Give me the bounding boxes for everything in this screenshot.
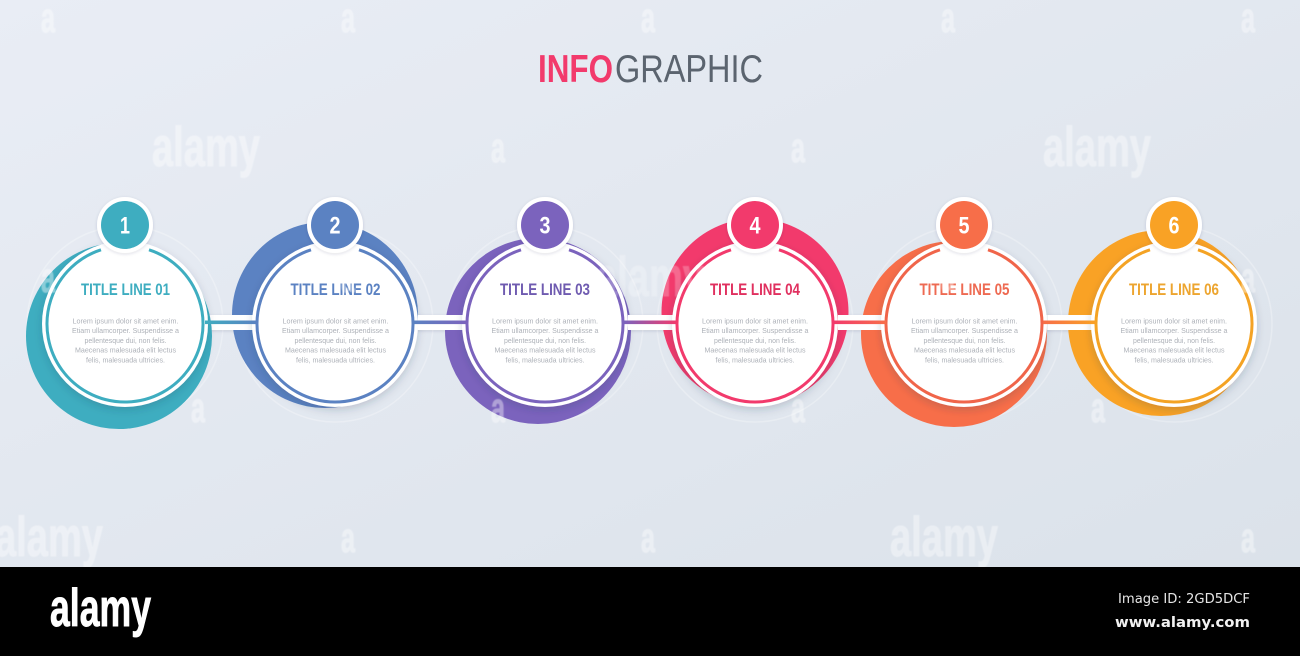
step 1 number badge: 1 [120, 212, 130, 240]
step 5 body text: Etiam ullamcorper. Suspendisse a [911, 326, 1019, 335]
connector band over disc 5 [838, 315, 895, 330]
step 3 body text [492, 316, 599, 364]
step 5 heading: TITLE LINE 05 [920, 281, 1010, 299]
watermarks: a [191, 384, 205, 431]
step 2 body text: pellentesque dui, non felis. [294, 336, 376, 345]
step 5 number badge [936, 197, 992, 253]
step 6 [1048, 197, 1257, 416]
connector band over disc 3 [418, 315, 490, 330]
step 2 heading: TITLE LINE 02 [290, 281, 380, 299]
step 1 body text: Maecenas malesuada elit lectus [75, 346, 176, 355]
connector: white band [195, 315, 1105, 330]
step 4 body text [702, 316, 809, 364]
watermarks: a [1091, 384, 1105, 431]
step 3 body text: felis, malesuada ultricies. [506, 355, 584, 364]
step 2 body text: Maecenas malesuada elit lectus [285, 346, 386, 355]
step 5 body text: Maecenas malesuada elit lectus [914, 346, 1015, 355]
step 4 body text: felis, malesuada ultricies. [716, 355, 794, 364]
step 5 body text: pellentesque dui, non felis. [924, 336, 1006, 345]
step 5 white disc [881, 241, 1047, 407]
watermarks: a [1241, 514, 1255, 561]
watermarks: alamy [890, 505, 998, 568]
step 1 body text: Lorem ipsum dolor sit amet enim. [72, 316, 178, 326]
step 4 [628, 197, 848, 407]
website: www.alamy.com [1115, 615, 1250, 631]
step 4 number badge: 4 [750, 212, 761, 240]
watermarks: a [341, 514, 355, 561]
step 5 body text: felis, malesuada ultricies. [925, 355, 1004, 364]
step 1 body text: Etiam ullamcorper. Suspendisse a [72, 326, 180, 335]
watermarks: a [641, 514, 655, 561]
step 2 body text: felis, malesuada ultricies. [296, 355, 375, 364]
step 1 [26, 197, 212, 429]
watermarks: a [41, 254, 55, 301]
step 2 body text: Lorem ipsum dolor sit amet enim. [282, 316, 388, 326]
step 5 body text: Lorem ipsum dolor sit amet enim. [912, 316, 1018, 326]
step 4 white disc [672, 241, 838, 407]
step 4 number badge [727, 197, 783, 253]
step 3 body text: Etiam ullamcorper. Suspendisse a [492, 326, 599, 335]
step 2 ring [257, 250, 413, 402]
step 4 body text: pellentesque dui, non felis. [714, 336, 796, 345]
title: GRAPHIC [615, 48, 763, 91]
step 3 number badge [517, 197, 573, 253]
step 6 body text: Lorem ipsum dolor sit amet enim. [1121, 316, 1227, 326]
watermarks: a [341, 254, 355, 301]
step 2 number badge [307, 197, 363, 253]
step 5 backing disc [861, 241, 1047, 427]
step 4 body text: Maecenas malesuada elit lectus [704, 346, 806, 355]
step 3 body text: pellentesque dui, non felis. [504, 336, 586, 345]
step 2 number badge: 2 [330, 212, 340, 240]
step 5 ring [886, 250, 1042, 402]
step 3 [418, 197, 631, 424]
step 2 body text: Etiam ullamcorper. Suspendisse a [282, 326, 390, 335]
step 1 body text: felis, malesuada ultricies. [86, 355, 165, 364]
step 1 heading: TITLE LINE 01 [81, 281, 170, 299]
watermarks: a [941, 254, 955, 301]
title: INFO [538, 48, 613, 91]
step 6 heading: TITLE LINE 06 [1129, 281, 1219, 299]
step 5 number badge: 5 [958, 212, 970, 240]
connector band over disc 6 [1048, 315, 1105, 330]
step 3 number badge: 3 [540, 212, 550, 240]
title [538, 48, 763, 91]
step 3 white disc [462, 241, 628, 407]
step 2 backing disc [232, 222, 418, 408]
step 6 number badge [1146, 197, 1202, 253]
connector lines [205, 320, 1096, 324]
step 1 backing disc [26, 243, 212, 429]
step 6 backing disc [1068, 230, 1254, 416]
watermarks: a [791, 124, 805, 171]
watermarks: alamy [1043, 115, 1151, 178]
watermarks: a [791, 384, 805, 431]
step 6 number badge: 6 [1168, 212, 1180, 240]
step 5 body text [911, 316, 1019, 364]
connector band over disc 2 [225, 315, 265, 330]
step 4 heading: TITLE LINE 04 [710, 281, 801, 299]
step 1 ring [47, 250, 203, 402]
step 2 [225, 197, 418, 408]
step 3 ring [467, 250, 623, 402]
step 6 body text: felis, malesuada ultricies. [1134, 355, 1214, 364]
step 4 body text: Lorem ipsum dolor sit amet enim. [702, 316, 808, 326]
watermarks: a [1241, 254, 1255, 301]
image id: Image ID: 2GD5DCF [1118, 592, 1250, 607]
step 4 body text: Etiam ullamcorper. Suspendisse a [702, 326, 809, 335]
step 1 white disc [42, 241, 208, 407]
step 4 backing disc [662, 218, 848, 406]
step 6 body text: Etiam ullamcorper. Suspendisse a [1120, 326, 1228, 335]
step 3 backing disc [445, 238, 631, 424]
watermarks: alamy [152, 115, 260, 178]
step 1 number badge [97, 197, 153, 253]
footer bar [0, 567, 1300, 656]
connector band over disc 4 [628, 315, 705, 330]
step 6 ring [1096, 250, 1252, 402]
step 4 ring [677, 250, 833, 402]
step 2 body text [282, 316, 390, 364]
footer logo: alamy [50, 579, 151, 638]
step 3 heading: TITLE LINE 03 [500, 281, 590, 299]
step 2 white disc [252, 241, 418, 407]
watermarks: a [491, 384, 505, 431]
step 3 body text: Lorem ipsum dolor sit amet enim. [492, 316, 598, 326]
step 6 body text: pellentesque dui, non felis. [1133, 336, 1215, 345]
step 5 [838, 197, 1047, 427]
step 1 body text: pellentesque dui, non felis. [84, 336, 166, 345]
step 1 body text [72, 316, 180, 364]
step 6 body text: Maecenas malesuada elit lectus [1124, 346, 1225, 355]
step 6 body text [1120, 316, 1228, 364]
watermarks: alamy [596, 245, 704, 308]
step 6 white disc [1091, 241, 1257, 407]
step 3 body text: Maecenas malesuada elit lectus [494, 346, 596, 355]
watermarks: a [491, 124, 505, 171]
